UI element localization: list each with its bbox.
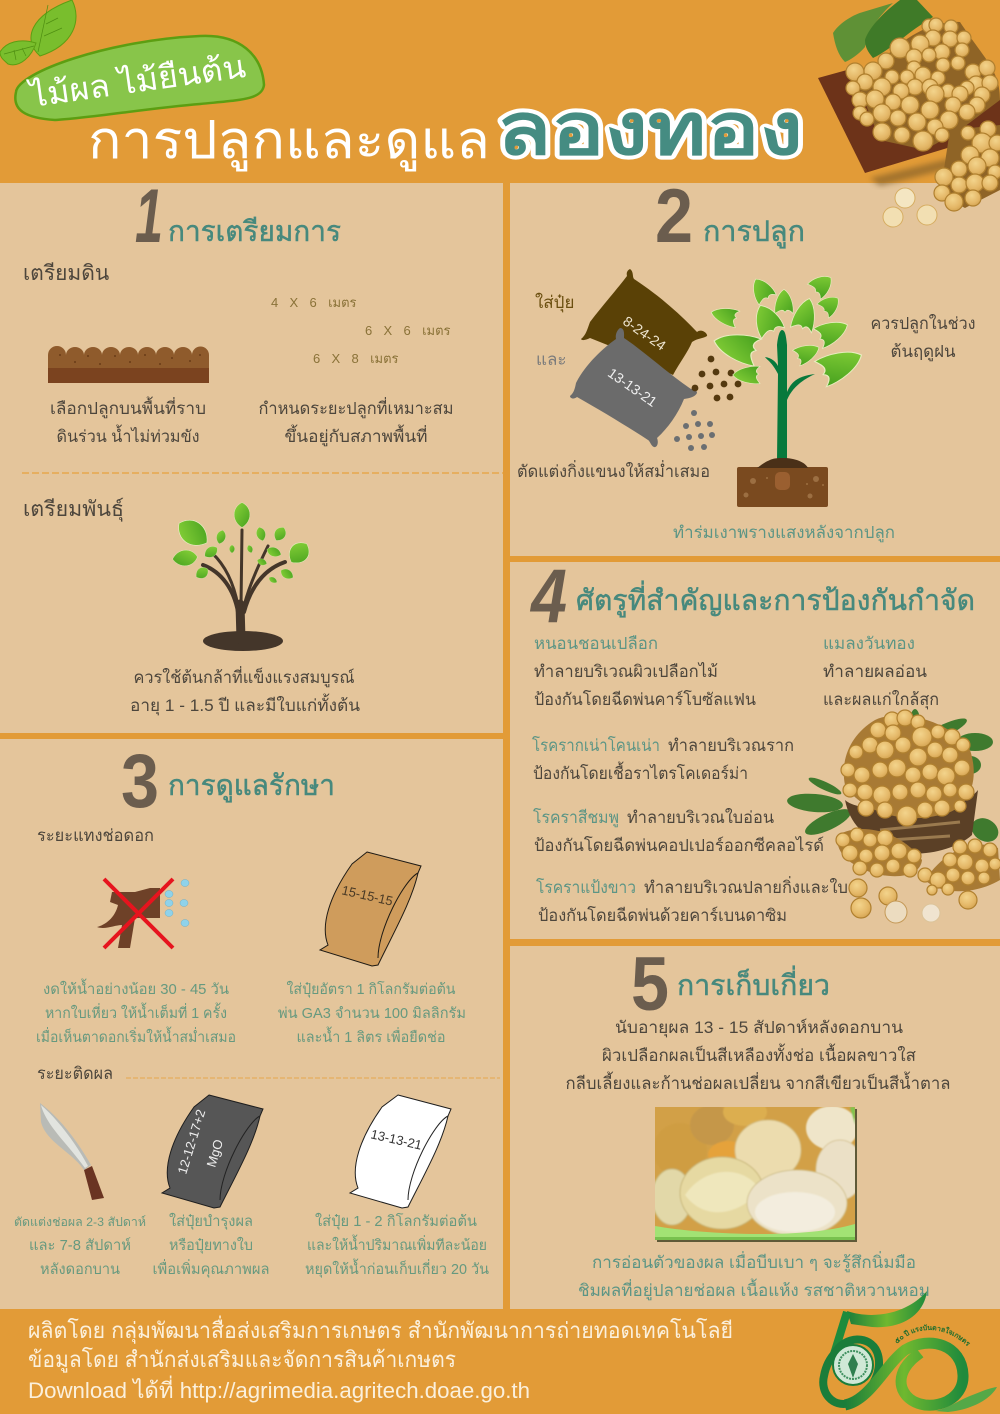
label: and: และ <box>536 350 567 369</box>
heading: preparation: การเตรียมการ <box>168 216 341 248</box>
text: ripeness test <box>578 1251 930 1301</box>
icon: fertilizer bag 15-15-15: 15-15-15 <box>340 882 394 909</box>
number 2: 2 <box>655 174 693 259</box>
icon: gray fertilizer bag: 12-12-17+2 <box>175 1108 208 1176</box>
subheading: soil: เตรียมดิน <box>23 262 109 285</box>
text: bark borer <box>534 634 756 709</box>
spacing options: 6 X 6 เมตร <box>365 323 451 338</box>
text: fertilizer and water: และให้น้ำปริมาณเพิ่มทีละน้อย <box>307 1234 487 1254</box>
number 4: 4 <box>529 554 567 639</box>
text: fruit fertilizer: เพื่อเพิ่มคุณภาพผล <box>152 1259 270 1278</box>
text: planting season <box>870 314 976 362</box>
icon: gray fertilizer bag: MgO <box>204 1138 226 1169</box>
text: soil selection: ดินร่วน น้ำไม่ท่วมขัง <box>56 424 200 446</box>
text: withhold water: หากใบเหี่ยว ให้น้ำเต็มที่ 1 ครั้ง <box>45 1002 227 1022</box>
text: fruit fertilizer <box>152 1212 270 1278</box>
text: powdery mildew: ป้องกันโดยฉีดพ่นด้วยคาร์เบนดาซิม <box>538 906 787 925</box>
text: harvest signs <box>566 1018 950 1093</box>
text: root rot: โรครากเน่าโคนเน่า <box>532 736 660 755</box>
text: fertilizer rate: และน้ำ 1 ลิตร เพื่อยืดช่อ <box>296 1026 446 1046</box>
icon: brown fertilizer bag: 8-24-24 <box>620 313 669 354</box>
text: shading: ทำร่มเงาพรางแสงหลังจากปลูก <box>673 523 895 543</box>
title: ลองทอง <box>497 90 803 170</box>
footer credits <box>28 1315 733 1403</box>
panel: 5 harvest <box>510 942 1000 1309</box>
text: withhold water: เมื่อเห็นตาดอกเริ่มให้น้ำสม่ำเสมอ <box>36 1026 236 1046</box>
text: pink disease <box>533 808 824 855</box>
subheading: flowering stage: ระยะแทงช่อดอก <box>37 826 154 845</box>
fertilizer granules brown <box>692 356 741 401</box>
icon: leaves <box>0 0 76 65</box>
text: root rot <box>532 736 794 783</box>
icon: gray fertilizer bag <box>570 328 697 447</box>
photo: peeled longkong <box>652 1098 864 1242</box>
panel: 3 care <box>0 739 503 1309</box>
text: fertilizer and water <box>305 1212 489 1278</box>
text: fruit thinning: และ 7-8 สัปดาห์ <box>29 1237 131 1254</box>
heading: care: การดูแลรักษา <box>168 770 335 803</box>
icon: white fertilizer bag: 13-13-21 <box>369 1126 423 1153</box>
title <box>88 90 803 172</box>
text: harvest signs: ผิวเปลือกผลเป็นสีเหลืองทั้งช่อ เนื้อผลขาวใส <box>602 1043 916 1065</box>
text: pink disease: ทำลายบริเวณใบอ่อน <box>627 808 774 827</box>
text: soil selection: เลือกปลูกบนพื้นที่ราบ <box>50 396 206 419</box>
icon: gray fertilizer bag <box>162 1095 263 1208</box>
heading: planting: การปลูก <box>703 216 805 249</box>
text: withhold water: งดให้น้ำอย่างน้อย 30 - 45 วัน <box>43 978 229 998</box>
header: green tag <box>0 0 264 120</box>
text: planting distance: ขึ้นอยู่กับสภาพพื้นที่ <box>284 424 428 447</box>
text: fruit thinning <box>14 1215 146 1278</box>
text: root rot: ป้องกันโดยเชื้อราไตรโคเดอร์ม่า <box>533 761 748 783</box>
badge text: ไม้ผล ไม้ยืนต้น <box>25 48 248 114</box>
fertilizer granules gray <box>674 410 715 451</box>
panel: 4 pests <box>510 554 1000 939</box>
text: seedling guidance <box>130 666 360 716</box>
footer credits: Download ได้ที่ http://agrimedia.agritech.doae.go.th <box>28 1375 530 1403</box>
text: fertilizer rate: พ่น GA3 จำนวน 100 มิลลิกรัม <box>278 1006 466 1022</box>
text: planting distance <box>258 397 454 447</box>
text: fertilizer rate: ใส่ปุ๋ยอัตรา 1 กิโลกรัมต่อต้น <box>286 980 456 998</box>
text: bark borer: ป้องกันโดยฉีดพ่นคาร์โบซัลแฟน <box>534 690 756 709</box>
spacing options <box>271 295 451 366</box>
heading: harvest: การเก็บเกี่ยว <box>677 966 830 1002</box>
text: pruning: ตัดแต่งกิ่งแขนงให้สม่ำเสมอ <box>517 460 710 481</box>
icon: gray fertilizer bag: 13-13-21 <box>605 365 660 410</box>
subheading: fruiting stage: ระยะติดผล <box>37 1064 113 1083</box>
icon: white fertilizer bag <box>350 1095 451 1208</box>
text: fertilizer and water: ใส่ปุ๋ย 1 - 2 กิโลกรัมต่อต้น <box>315 1212 477 1230</box>
text: powdery mildew: ทำลายบริเวณปลายกิ่งและใบ <box>644 876 848 897</box>
text: fruit fly: ทำลายผลอ่อน <box>823 662 927 681</box>
badge shape <box>15 36 264 120</box>
text: harvest signs: นับอายุผล 13 - 15 สัปดาห์หลังดอกบาน <box>615 1018 903 1038</box>
text: fruit fly: และผลแก่ใกล้สุก <box>823 690 939 710</box>
text: seedling guidance: อายุ 1 - 1.5 ปี และมีใบแก่ทั้งต้น <box>130 693 360 716</box>
icon: machete <box>40 1103 104 1200</box>
number 5: 5 <box>631 942 669 1027</box>
text: bark borer: หนอนชอนเปลือก <box>534 634 658 653</box>
photo: longkong on wooden board <box>818 0 1000 227</box>
text: fruit fly <box>823 634 939 710</box>
text: fruit fertilizer: ใส่ปุ๋ยบำรุงผล <box>169 1212 253 1230</box>
text: fertilizer rate <box>278 980 466 1046</box>
text: fruit thinning: หลังดอกบาน <box>40 1262 120 1278</box>
spacing options: 6 X 8 เมตร <box>313 351 399 366</box>
text: planting season: ต้นฤดูฝน <box>890 342 956 362</box>
icon: fertilizer bag 15-15-15 <box>320 852 421 966</box>
subheading: seedlings: เตรียมพันธุ์ <box>23 497 124 522</box>
text: ripeness test: ชิมผลที่อยู่ปลายช่อผล เนื้อแห้ง รสชาติหวานหอม <box>578 1278 930 1301</box>
text: soil selection <box>50 396 206 446</box>
text: planting season: ควรปลูกในช่วง <box>870 314 976 334</box>
title: การปลูกและดูแล <box>88 112 490 172</box>
text: pink disease: โรคราสีชมพู <box>533 808 619 828</box>
icon: seedling tree <box>172 502 314 651</box>
text: fruit thinning: ตัดแต่งช่อผล 2-3 สัปดาห์ <box>14 1215 146 1229</box>
panel: 1 preparation <box>0 174 503 733</box>
text: ripeness test: การอ่อนตัวของผล เมื่อบีบเบา ๆ จะรู้สึกนิ่มมือ <box>592 1251 916 1273</box>
text: harvest signs: กลีบเลี้ยงและก้านช่อผลเปลี่ยน จากสีเขียวเป็นสีน้ำตาล <box>566 1071 950 1093</box>
icon: young tree in soil <box>709 270 867 507</box>
panel: 2 planting <box>510 174 1000 556</box>
photo: longkong in basket <box>786 709 1000 923</box>
icon: brown fertilizer bag <box>581 269 707 375</box>
label: fertilizer: ใส่ปุ๋ย <box>535 292 574 313</box>
icon: watering can crossed out <box>97 879 189 948</box>
text: planting distance: กำหนดระยะปลูกที่เหมาะสม <box>258 397 454 419</box>
text: fertilizer and water: หยุดให้น้ำก่อนเก็บเกี่ยว 20 วัน <box>305 1258 489 1278</box>
text: fruit fly: แมลงวันทอง <box>823 634 915 653</box>
text: seedling guidance: ควรใช้ต้นกล้าที่แข็งแรงสมบูรณ์ <box>134 666 354 688</box>
logo: 50 years: ๕๐ ปี แรงบันดาลใจเกษตรไทย <box>896 1324 970 1346</box>
number 1: 1 <box>135 174 163 259</box>
icon: soil cross section <box>48 346 209 383</box>
heading: pests: ศัตรูที่สำคัญและการป้องกันกำจัด <box>576 581 975 618</box>
footer credits: ผลิตโดย กลุ่มพัฒนาสื่อส่งเสริมการเกษตร สำนักพัฒนาการถ่ายทอดเทคโนโลยี <box>28 1315 733 1344</box>
text: bark borer: ทำลายบริเวณผิวเปลือกไม้ <box>534 662 718 681</box>
text: powdery mildew <box>536 876 848 925</box>
text: powdery mildew: โรคราแป้งขาว <box>536 878 636 897</box>
text: root rot: ทำลายบริเวณราก <box>668 736 794 755</box>
text: fruit fertilizer: หรือปุ๋ยทางใบ <box>169 1236 253 1254</box>
footer credits: ข้อมูลโดย สำนักส่งเสริมและจัดการสินค้าเกษตร <box>28 1347 456 1373</box>
text: pink disease: ป้องกันโดยฉีดพ่นคอปเปอร์ออกซีคลอไรด์ <box>534 836 824 855</box>
spacing options: 4 X 6 เมตร <box>271 295 357 310</box>
number 3: 3 <box>121 739 159 824</box>
text: withhold water <box>36 978 236 1046</box>
